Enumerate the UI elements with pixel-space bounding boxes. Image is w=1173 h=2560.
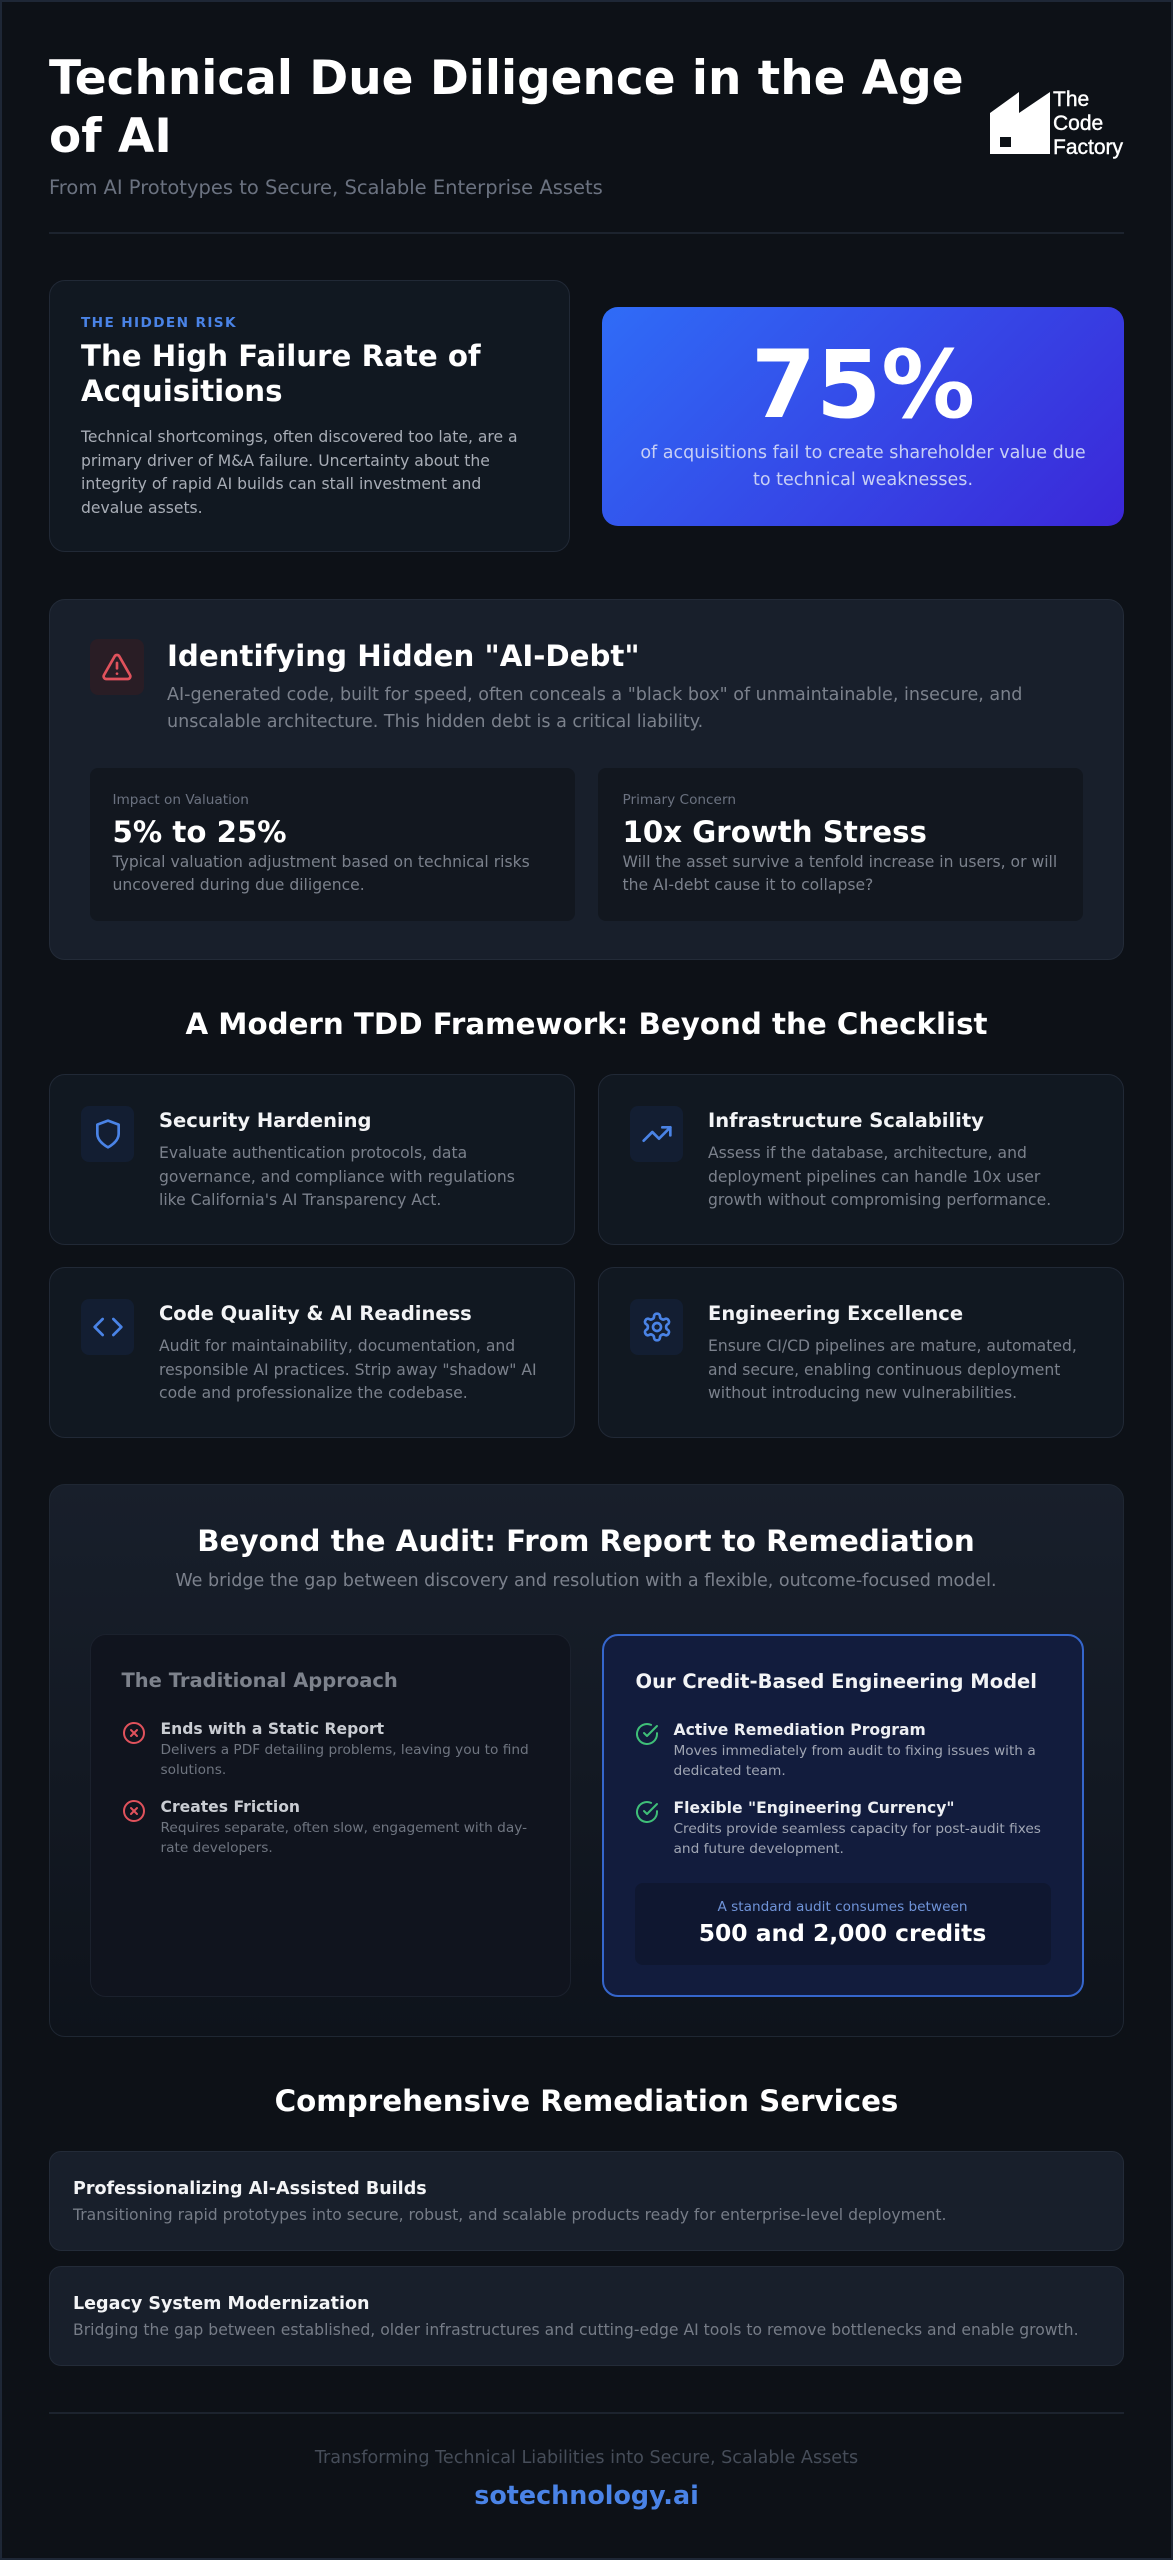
logo wordmark: Code — [1053, 112, 1103, 135]
icon: check circle — [636, 1801, 658, 1823]
stat label: Impact on Valuation — [112, 792, 249, 808]
item text: rate developers. — [160, 1840, 273, 1856]
title: Technical Due Diligence in the Age — [49, 51, 964, 106]
body text: primary driver of M&A failure. Uncertainty about the — [81, 452, 490, 470]
card title: Security Hardening — [159, 1109, 372, 1132]
heading: The High Failure Rate of — [81, 339, 481, 373]
card: engineering excellence — [598, 1267, 1124, 1438]
logo wordmark: Factory — [1053, 136, 1123, 159]
card text: and secure, enabling continuous deployment — [708, 1360, 1060, 1378]
card: code quality — [49, 1267, 575, 1438]
card text: governance, and compliance with regulations — [159, 1168, 515, 1186]
eyebrow label: THE HIDDEN RISK — [81, 315, 237, 331]
heading — [81, 339, 481, 408]
card text: like California's AI Transparency Act. — [159, 1191, 441, 1209]
card: infrastructure scalability — [598, 1074, 1124, 1245]
column: credit-based model — [602, 1634, 1084, 1996]
statistic caption: to technical weaknesses. — [753, 470, 973, 490]
item text: Delivers a PDF detailing problems, leaving you to find — [160, 1742, 529, 1758]
service text: Bridging the gap between established, older infrastructures and cutting-edge AI tools to remove bottlenecks and enable growth. — [73, 2321, 1079, 2339]
item: active remediation — [636, 1720, 1036, 1779]
item title: Creates Friction — [160, 1798, 300, 1816]
item title: Ends with a Static Report — [160, 1720, 384, 1738]
card: professionalizing builds — [49, 2151, 1124, 2251]
card text: Ensure CI/CD pipelines are mature, automated, — [708, 1337, 1077, 1355]
footer tagline: Transforming Technical Liabilities into Secure, Scalable Assets — [315, 2448, 858, 2468]
item text — [674, 1742, 1036, 1779]
icon: x circle — [123, 1722, 145, 1744]
icon: gear — [630, 1299, 683, 1355]
item: creates friction — [123, 1798, 527, 1856]
subtitle: From AI Prototypes to Secure, Scalable Enterprise Assets — [49, 176, 603, 199]
column heading: The Traditional Approach — [122, 1668, 398, 1692]
body text: devalue assets. — [81, 499, 203, 517]
panel: 75% statistic — [602, 307, 1124, 526]
logo wordmark — [1053, 88, 1124, 159]
item text: and future development. — [674, 1841, 844, 1857]
description: unscalable architecture. This hidden debt is a critical liability. — [167, 712, 703, 732]
callout: credits — [634, 1882, 1050, 1964]
title: of AI — [49, 109, 172, 164]
stat description: Will the asset survive a tenfold increase in users, or will — [622, 852, 1057, 870]
heading: Acquisitions — [81, 374, 283, 408]
item text: dedicated team. — [674, 1763, 786, 1779]
panel: the hidden risk — [49, 280, 570, 552]
item title: Active Remediation Program — [674, 1720, 926, 1738]
card text: Audit for maintainability, documentation, and — [159, 1337, 515, 1355]
item text — [674, 1820, 1041, 1857]
icon: warning triangle — [90, 638, 144, 694]
header divider — [49, 232, 1124, 234]
card text — [708, 1337, 1077, 1402]
item text: solutions. — [160, 1762, 226, 1778]
stat label: Primary Concern — [622, 792, 736, 808]
column heading: Our Credit-Based Engineering Model — [636, 1670, 1037, 1692]
icon: check circle — [636, 1723, 658, 1745]
item text: Credits provide seamless capacity for post-audit fixes — [674, 1820, 1041, 1836]
footer link: sotechnology.ai — [474, 2480, 699, 2510]
card text: responsible AI practices. Strip away "shadow" AI — [159, 1360, 537, 1378]
body text: Technical shortcomings, often discovered too late, are a — [81, 428, 518, 446]
card title: Engineering Excellence — [708, 1302, 963, 1325]
callout value: 500 and 2,000 credits — [699, 1918, 986, 1946]
card title: Infrastructure Scalability — [708, 1109, 984, 1132]
title — [49, 51, 964, 164]
stat card: primary concern — [598, 768, 1082, 920]
icon: code brackets — [81, 1299, 134, 1355]
card title: Code Quality & AI Readiness — [159, 1302, 472, 1325]
icon: shield — [81, 1106, 134, 1162]
card text: deployment pipelines can handle 10x user — [708, 1168, 1040, 1186]
body text: integrity of rapid AI builds can stall investment and — [81, 475, 481, 493]
stat description: Typical valuation adjustment based on technical risks — [112, 852, 530, 870]
item text — [160, 1742, 529, 1778]
statistic caption — [640, 443, 1086, 490]
stat description: uncovered during due diligence. — [112, 876, 365, 894]
logo: The Code Factory — [990, 88, 1124, 159]
service text: Transitioning rapid prototypes into secure, robust, and scalable products ready for enterprise-level deployment. — [73, 2206, 946, 2224]
stat value: 5% to 25% — [112, 814, 287, 848]
service title: Legacy System Modernization — [73, 2294, 370, 2314]
section heading: services: Comprehensive Remediation Services — [275, 2084, 898, 2118]
column: traditional approach — [90, 1634, 570, 1996]
logo wordmark: The — [1053, 88, 1089, 111]
item: engineering currency — [636, 1798, 1041, 1857]
card text: Assess if the database, architecture, and — [708, 1144, 1027, 1162]
icon: factory building — [990, 92, 1050, 154]
stat description: the AI-debt cause it to collapse? — [622, 876, 873, 894]
stat card: impact on valuation — [90, 768, 574, 920]
item: static report — [123, 1720, 529, 1778]
service title: Professionalizing AI-Assisted Builds — [73, 2179, 427, 2199]
stat value: 10x Growth Stress — [622, 814, 927, 848]
stat description — [112, 852, 530, 894]
panel: beyond the audit — [49, 1484, 1124, 2037]
item text — [160, 1820, 527, 1856]
big number: 75% — [751, 331, 975, 440]
card text — [159, 1144, 515, 1209]
description: AI-generated code, built for speed, often conceals a "black box" of unmaintainable, insecure, and — [167, 685, 1022, 705]
card text: Evaluate authentication protocols, data — [159, 1144, 467, 1162]
card text — [159, 1337, 537, 1402]
section heading: framework: A Modern TDD Framework: Beyond the Checklist — [185, 1007, 988, 1041]
card text: code and professionalize the codebase. — [159, 1384, 468, 1402]
item text: Moves immediately from audit to fixing issues with a — [674, 1742, 1036, 1758]
body text — [80, 428, 518, 517]
card: legacy modernization — [49, 2266, 1124, 2366]
card text: growth without compromising performance. — [708, 1191, 1051, 1209]
card text — [708, 1144, 1051, 1209]
stat description — [622, 852, 1057, 894]
description — [167, 685, 1022, 732]
card: security hardening — [49, 1074, 575, 1245]
statistic caption: of acquisitions fail to create shareholder value due — [640, 443, 1086, 463]
heading: Beyond the Audit: From Report to Remediation — [197, 1524, 975, 1558]
item title: Flexible "Engineering Currency" — [674, 1798, 954, 1816]
subheading: We bridge the gap between discovery and resolution with a flexible, outcome-focused model. — [175, 1571, 997, 1591]
icon: x circle — [123, 1800, 145, 1822]
icon: trending up — [630, 1106, 683, 1162]
item text: Requires separate, often slow, engagement with day- — [160, 1820, 527, 1836]
heading: Identifying Hidden "AI-Debt" — [167, 639, 640, 673]
footer divider — [49, 2412, 1124, 2414]
callout label: A standard audit consumes between — [718, 1898, 968, 1914]
panel: identifying hidden AI-debt — [49, 599, 1124, 960]
card text: without introducing new vulnerabilities. — [708, 1384, 1017, 1402]
